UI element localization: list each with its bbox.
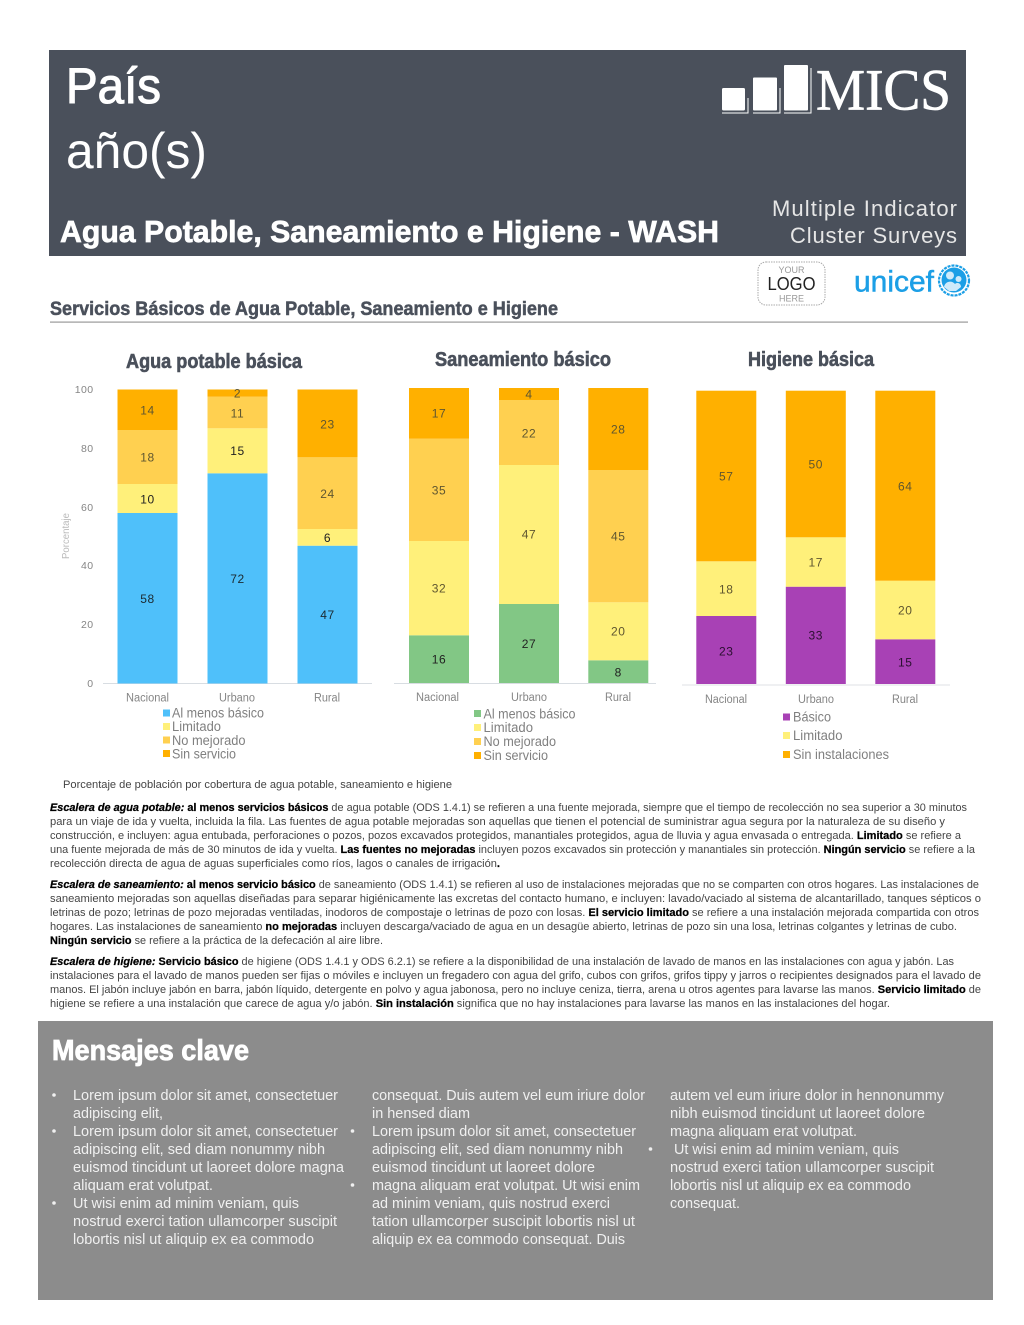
text block: escalera de higiene	[50, 956, 981, 1010]
bar: Urbano: 11	[231, 406, 244, 420]
chart: saneamiento básico	[394, 349, 656, 763]
text block: escalera de saneamiento	[50, 879, 981, 947]
bar: Rural: 20	[611, 624, 626, 638]
bar: Urbano: 27	[522, 637, 536, 651]
bar: Rural: 28	[611, 422, 626, 436]
key messages column 1: lobortis nisl ut aliquip ex ea commodo	[73, 1231, 314, 1248]
x axis labels: Urbano	[219, 692, 255, 704]
bar: Urbano: 4	[525, 388, 533, 402]
text block: escalera de agua potable: para un viaje de ida y vuelta, incluida la fila. Las fuentes de agua potable mejoradas son aquellas que tienen el potencial de suministrar agua segura por la naturaleza de su diseño y	[50, 816, 945, 828]
key messages column 2: aliquip ex ea commodo consequat. Duis	[372, 1231, 625, 1248]
legend	[474, 706, 576, 763]
bar: Rural: 45	[611, 530, 626, 544]
legend: Sin servicio	[172, 746, 236, 762]
bar: Rural: 20	[898, 604, 913, 618]
chart heading: Higiene básica	[748, 349, 875, 371]
bar: Nacional: 35	[432, 484, 446, 498]
MICS tagline	[772, 196, 957, 248]
y axis: 60	[81, 502, 94, 514]
y axis: 20	[81, 619, 94, 631]
chart: higiene básica	[682, 349, 950, 762]
key messages column 1: adipiscing elit,	[73, 1105, 163, 1122]
bar: Urbano	[786, 391, 846, 684]
bar: Rural	[875, 391, 935, 684]
key messages column 2: consequat. Duis autem vel eum iriure dolor	[372, 1087, 645, 1104]
bar: Rural	[588, 388, 648, 683]
bar: Rural: 64	[898, 480, 913, 494]
legend: Básico	[793, 710, 831, 724]
bar: Nacional: 32	[432, 582, 446, 596]
legend: Al menos básico	[172, 706, 264, 720]
x axis labels	[126, 692, 340, 704]
legend: Limitado	[484, 720, 533, 735]
key messages column 2: adipiscing elit, sed diam nonummy nibh	[372, 1141, 623, 1158]
key messages column 3: nibh euismod tincidunt ut laoreet dolore	[670, 1105, 925, 1122]
text block: escalera de saneamiento: saneamiento mejoradas son aquellas diseñadas para separar higiénicamente las excretas del contacto humano, e incluyen: lavado/vaciado al sistema de alcantarillado, tanques sépticos o	[50, 893, 981, 905]
key messages column 2: tation ullamcorper suscipit lobortis nisl ut	[372, 1213, 636, 1230]
bar: Rural: 6	[324, 531, 331, 545]
bar: Urbano	[208, 386, 268, 684]
text block: escalera de saneamiento: Escalera de saneamiento: al menos servicio básico de saneamiento (ODS 1.4.1) se refieren al uso de instalaciones mejoradas que no se comparten con otros hogares. Las instalaciones de	[50, 879, 979, 891]
text block: escalera de agua potable	[50, 802, 976, 870]
y axis	[60, 384, 94, 690]
legend	[163, 706, 264, 762]
x axis labels	[705, 694, 918, 706]
bar: Nacional	[696, 391, 756, 684]
key messages column 1: aliquam erat volutpat.	[73, 1177, 213, 1194]
legend: Sin instalaciones	[793, 747, 889, 762]
key messages column 2: magna aliquam erat volutpat. Ut wisi enim	[372, 1177, 640, 1194]
bar: Urbano: 50	[809, 458, 823, 472]
y axis: 40	[81, 560, 94, 572]
y axis: 80	[81, 443, 94, 455]
text block: escalera de higiene: instalaciones para el lavado de manos pueden ser fijas o móviles e incluyen un fregadero con agua del grifo, cubos con grifos, grifos tippy y jarros o recipientes designados para el lavado de	[50, 970, 981, 982]
text block: escalera de higiene: manos. El jabón incluye jabón en barra, jabón líquido, detergente en polvo y agua jabonosa, pero no incluye ceniza, tierra, arena u otros agentes para lavarse las manos. Servicio limitado de	[50, 984, 981, 996]
bar: Rural: 15	[898, 656, 913, 670]
panel heading: Mensajes clave	[52, 1035, 249, 1067]
key messages column 2: euismod tincidunt ut laoreet dolore	[372, 1159, 595, 1176]
icon: your logo placeholder	[758, 262, 825, 305]
key messages column 1	[52, 1087, 345, 1248]
key messages column 2: in hensed diam	[372, 1105, 470, 1122]
chart caption: Porcentaje de población por cobertura de agua potable, saneamiento e higiene	[63, 779, 452, 791]
x axis labels: Rural	[314, 692, 340, 704]
text block: escalera de saneamiento: Ningún servicio se refiere a la práctica de la defecación al aire libre.	[50, 935, 383, 947]
x axis labels: Urbano	[511, 692, 547, 704]
key messages column 2	[351, 1087, 645, 1248]
key messages column 3: nostrud exerci tation ullamcorper suscipit	[670, 1159, 935, 1176]
bar: Nacional: 14	[140, 404, 155, 418]
text block: escalera de saneamiento: hogares. Las instalaciones de saneamiento no mejoradas incluyen descarga/vaciado de agua en un desagüe abierto, letrinas de pozo sin una losa, letrinas colgantes y letrinas de cubo.	[50, 921, 957, 933]
legend	[783, 710, 889, 762]
bar: Nacional: 58	[140, 592, 155, 606]
x axis labels: Nacional	[416, 692, 459, 704]
icon: unicef logo: unicef	[854, 266, 935, 298]
chart: agua potable básica	[60, 351, 372, 762]
x axis labels: Rural	[892, 694, 918, 706]
bar: Nacional: 57	[719, 470, 734, 484]
text block: escalera de agua potable: una fuente mejorada de más de 30 minutos de ida y vuelta. Las fuentes no mejoradas incluyen pozos excavados sin protección y manantiales sin protección. Ningún servicio se refiere a la	[50, 844, 976, 856]
key messages column 1: euismod tincidunt ut laoreet dolore magna	[73, 1159, 345, 1176]
title: country: País	[66, 58, 161, 114]
x axis labels: Nacional	[705, 694, 747, 706]
icon: your logo placeholder: HERE	[779, 294, 804, 304]
bar: Nacional: 23	[719, 644, 734, 658]
bar: Nacional: 18	[719, 582, 734, 596]
legend: Limitado	[793, 728, 842, 743]
x axis labels	[416, 692, 631, 704]
header banner	[49, 50, 966, 256]
icon: MICS logo: MICS	[816, 58, 951, 122]
bar: Urbano: 15	[230, 444, 245, 458]
icon: your logo placeholder: LOGO	[768, 274, 816, 294]
bar: Urbano	[499, 388, 559, 683]
legend: Limitado	[172, 719, 221, 734]
section heading: Servicios Básicos de Agua Potable, Saneamiento e Higiene	[50, 299, 558, 320]
key messages column 3: autem vel eum iriure dolor in hennonummy	[670, 1087, 944, 1104]
bar: Urbano: 72	[230, 572, 245, 586]
bar: Urbano: 22	[522, 426, 536, 440]
bar: Nacional	[409, 388, 469, 683]
key messages column 1: adipiscing elit, sed diam nonummy nibh	[73, 1141, 325, 1158]
key messages column 3	[649, 1087, 944, 1212]
bar: Rural	[298, 390, 358, 684]
bar: Nacional: 16	[432, 652, 446, 666]
bar: Urbano: 47	[522, 528, 536, 542]
y axis: 0	[87, 678, 94, 690]
text block: escalera de agua potable: recolección directa de agua de aguas superficiales como ríos, lagos o canales de irrigación .	[50, 858, 500, 870]
legend: Al menos básico	[484, 706, 576, 722]
chart heading: Agua potable básica	[126, 351, 303, 373]
bar: Nacional: 18	[140, 450, 155, 464]
title: years: año(s)	[66, 123, 207, 179]
bar: Rural: 24	[320, 487, 335, 501]
text block: escalera de higiene: higiene se refiere a una instalación que carece de agua y/o jabón. Sin instalación significa que no hay instalaciones para lavarse las manos en las instalaciones del hogar.	[50, 998, 890, 1010]
y axis: Porcentaje	[60, 513, 72, 559]
text block: escalera de saneamiento: letrinas de pozo; letrinas de pozo mejoradas ventiladas, inodoros de compostaje o letrinas de pozo con losas. El servicio limitado se refiere a una instalación mejorada compartida con otros	[50, 907, 979, 919]
text block: escalera de agua potable: construcción, e incluyen: agua entubada, perforaciones o pozos, pozos excavados protegidos, manantiales protegidos, agua de lluvia y agua envasada o entregada. Limitado se refiere a	[50, 830, 962, 842]
MICS tagline: Cluster Surveys	[790, 223, 957, 248]
x axis labels: Nacional	[126, 692, 169, 704]
key messages column 3: Ut wisi enim ad minim veniam, quis	[674, 1141, 899, 1158]
bar: Nacional: 10	[140, 492, 155, 506]
bar: Rural: 47	[320, 608, 335, 622]
key messages column 3: lobortis nisl ut aliquip ex ea commodo	[670, 1177, 911, 1194]
bar: Urbano: 17	[809, 556, 823, 570]
text block: escalera de higiene: Escalera de higiene: Servicio básico de higiene (ODS 1.4.1 y ODS 6.2.1) se refiere a la disponibilidad de una instalación de lavado de manos en las instalaciones con agua y jabón. Las	[50, 956, 954, 968]
key messages column 2: ad minim veniam, quis nostrud exerci	[372, 1195, 610, 1212]
MICS tagline: Multiple Indicator	[772, 196, 957, 221]
legend: No mejorado	[172, 733, 246, 748]
icon: your logo placeholder: YOUR	[778, 265, 805, 275]
legend: No mejorado	[484, 734, 556, 749]
key messages column 1: Lorem ipsum dolor sit amet, consectetuer	[73, 1123, 338, 1140]
key messages column 1: nostrud exerci tation ullamcorper suscipit	[73, 1213, 338, 1230]
text block: escalera de agua potable: Escalera de agua potable: al menos servicios básicos de agua potable (ODS 1.4.1) se refieren a una fuente mejorada, siempre que el tiempo de recolección no sea superior a 30 minutos	[50, 802, 967, 814]
legend: Sin servicio	[484, 748, 548, 763]
key messages column 2: Lorem ipsum dolor sit amet, consectetuer	[372, 1123, 636, 1140]
bar: Nacional	[118, 390, 178, 684]
y axis: 100	[75, 384, 94, 396]
panel: mensajes clave	[38, 1021, 993, 1300]
x axis labels: Urbano	[798, 694, 834, 706]
x axis labels: Rural	[605, 692, 631, 704]
subtitle: Agua Potable, Saneamiento e Higiene - WASH	[60, 214, 719, 249]
bar: Rural: 8	[615, 666, 622, 680]
bar: Rural: 23	[320, 418, 335, 432]
key messages column 3: consequat.	[670, 1195, 740, 1212]
bar: Urbano: 2	[234, 386, 241, 400]
chart heading: Saneamiento básico	[435, 349, 611, 371]
bar: Urbano: 33	[809, 628, 823, 642]
key messages column 3: magna aliquam erat volutpat.	[670, 1123, 857, 1140]
bar: Nacional: 17	[432, 406, 446, 420]
key messages column 1: Lorem ipsum dolor sit amet, consectetuer	[73, 1087, 338, 1104]
icon: unicef logo	[854, 266, 969, 298]
icon: MICS logo	[722, 58, 951, 122]
key messages column 1: Ut wisi enim ad minim veniam, quis	[73, 1195, 299, 1212]
